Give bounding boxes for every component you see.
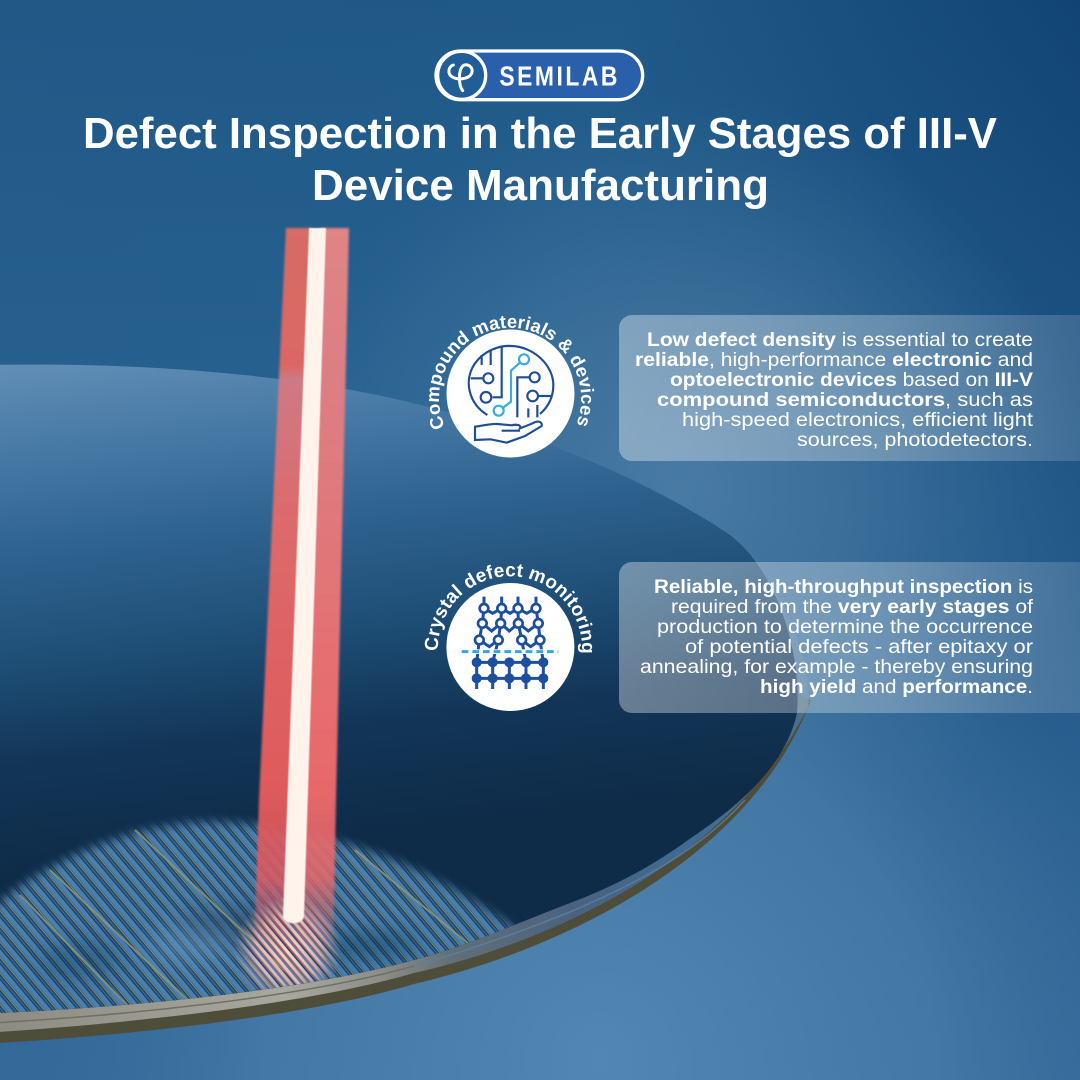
icon: circuit in a hand <box>469 346 553 443</box>
wafer surface <box>0 364 798 1014</box>
panel text: reliable , high-performance electronic and <box>635 349 1033 371</box>
rim groove lines <box>0 800 745 1023</box>
panel text: compound semiconductors , such as <box>657 389 1033 411</box>
panel text: of potential defects - after epitaxy or <box>685 636 1034 658</box>
panel text: high yield and performance . <box>760 676 1033 698</box>
wafer grey bevel <box>0 533 809 1032</box>
badge disc <box>446 583 574 711</box>
yellow streaks <box>20 830 470 1008</box>
dark and light blotches on the stripes <box>40 907 420 980</box>
title <box>83 109 998 210</box>
icon: crystal lattice with defect line <box>462 597 558 689</box>
laser beam <box>236 226 351 990</box>
panel: low defect density <box>619 315 1080 461</box>
panel text <box>635 329 1034 451</box>
beam core <box>283 228 326 923</box>
title: Device Manufacturing <box>312 161 769 210</box>
panel background <box>619 562 1080 713</box>
logo glyph <box>449 65 472 91</box>
logo circle mark <box>438 51 486 99</box>
panel text: required from the very early stages of <box>671 596 1034 618</box>
panel text: Reliable, high-throughput inspection is <box>654 576 1033 598</box>
panel background <box>619 315 1080 461</box>
panel text: sources, photodetectors. <box>797 429 1033 451</box>
panel: reliable inspection <box>619 562 1080 713</box>
logo pill <box>436 51 643 100</box>
wafer olive edge <box>0 690 811 1044</box>
panel text: production to determine the occurrence <box>657 616 1033 638</box>
title: Defect Inspection in the Early Stages of III-V <box>83 109 998 158</box>
panel text: annealing, for example - thereby ensuring <box>640 656 1033 678</box>
beam right half <box>296 228 349 950</box>
panel text: high-speed electronics, efficient light <box>682 409 1034 431</box>
logo <box>436 51 643 100</box>
beam impact on the wafer <box>236 899 341 990</box>
badge: compound materials and devices <box>429 316 594 458</box>
panel text: optoelectronic devices based on III-V <box>670 369 1033 391</box>
striped scanned area on the wafer <box>0 815 520 1013</box>
badge: crystal defect monitoring <box>424 564 592 711</box>
beam left half <box>254 228 312 950</box>
curved label: Compound materials & devices <box>429 316 594 429</box>
panel text <box>640 576 1034 698</box>
wafer <box>0 364 811 1080</box>
logo wordmark: SEMILAB <box>499 61 620 92</box>
badge disc <box>446 330 574 458</box>
panel text: Low defect density is essential to create <box>647 329 1033 351</box>
curved label: Crystal defect monitoring <box>424 564 592 652</box>
